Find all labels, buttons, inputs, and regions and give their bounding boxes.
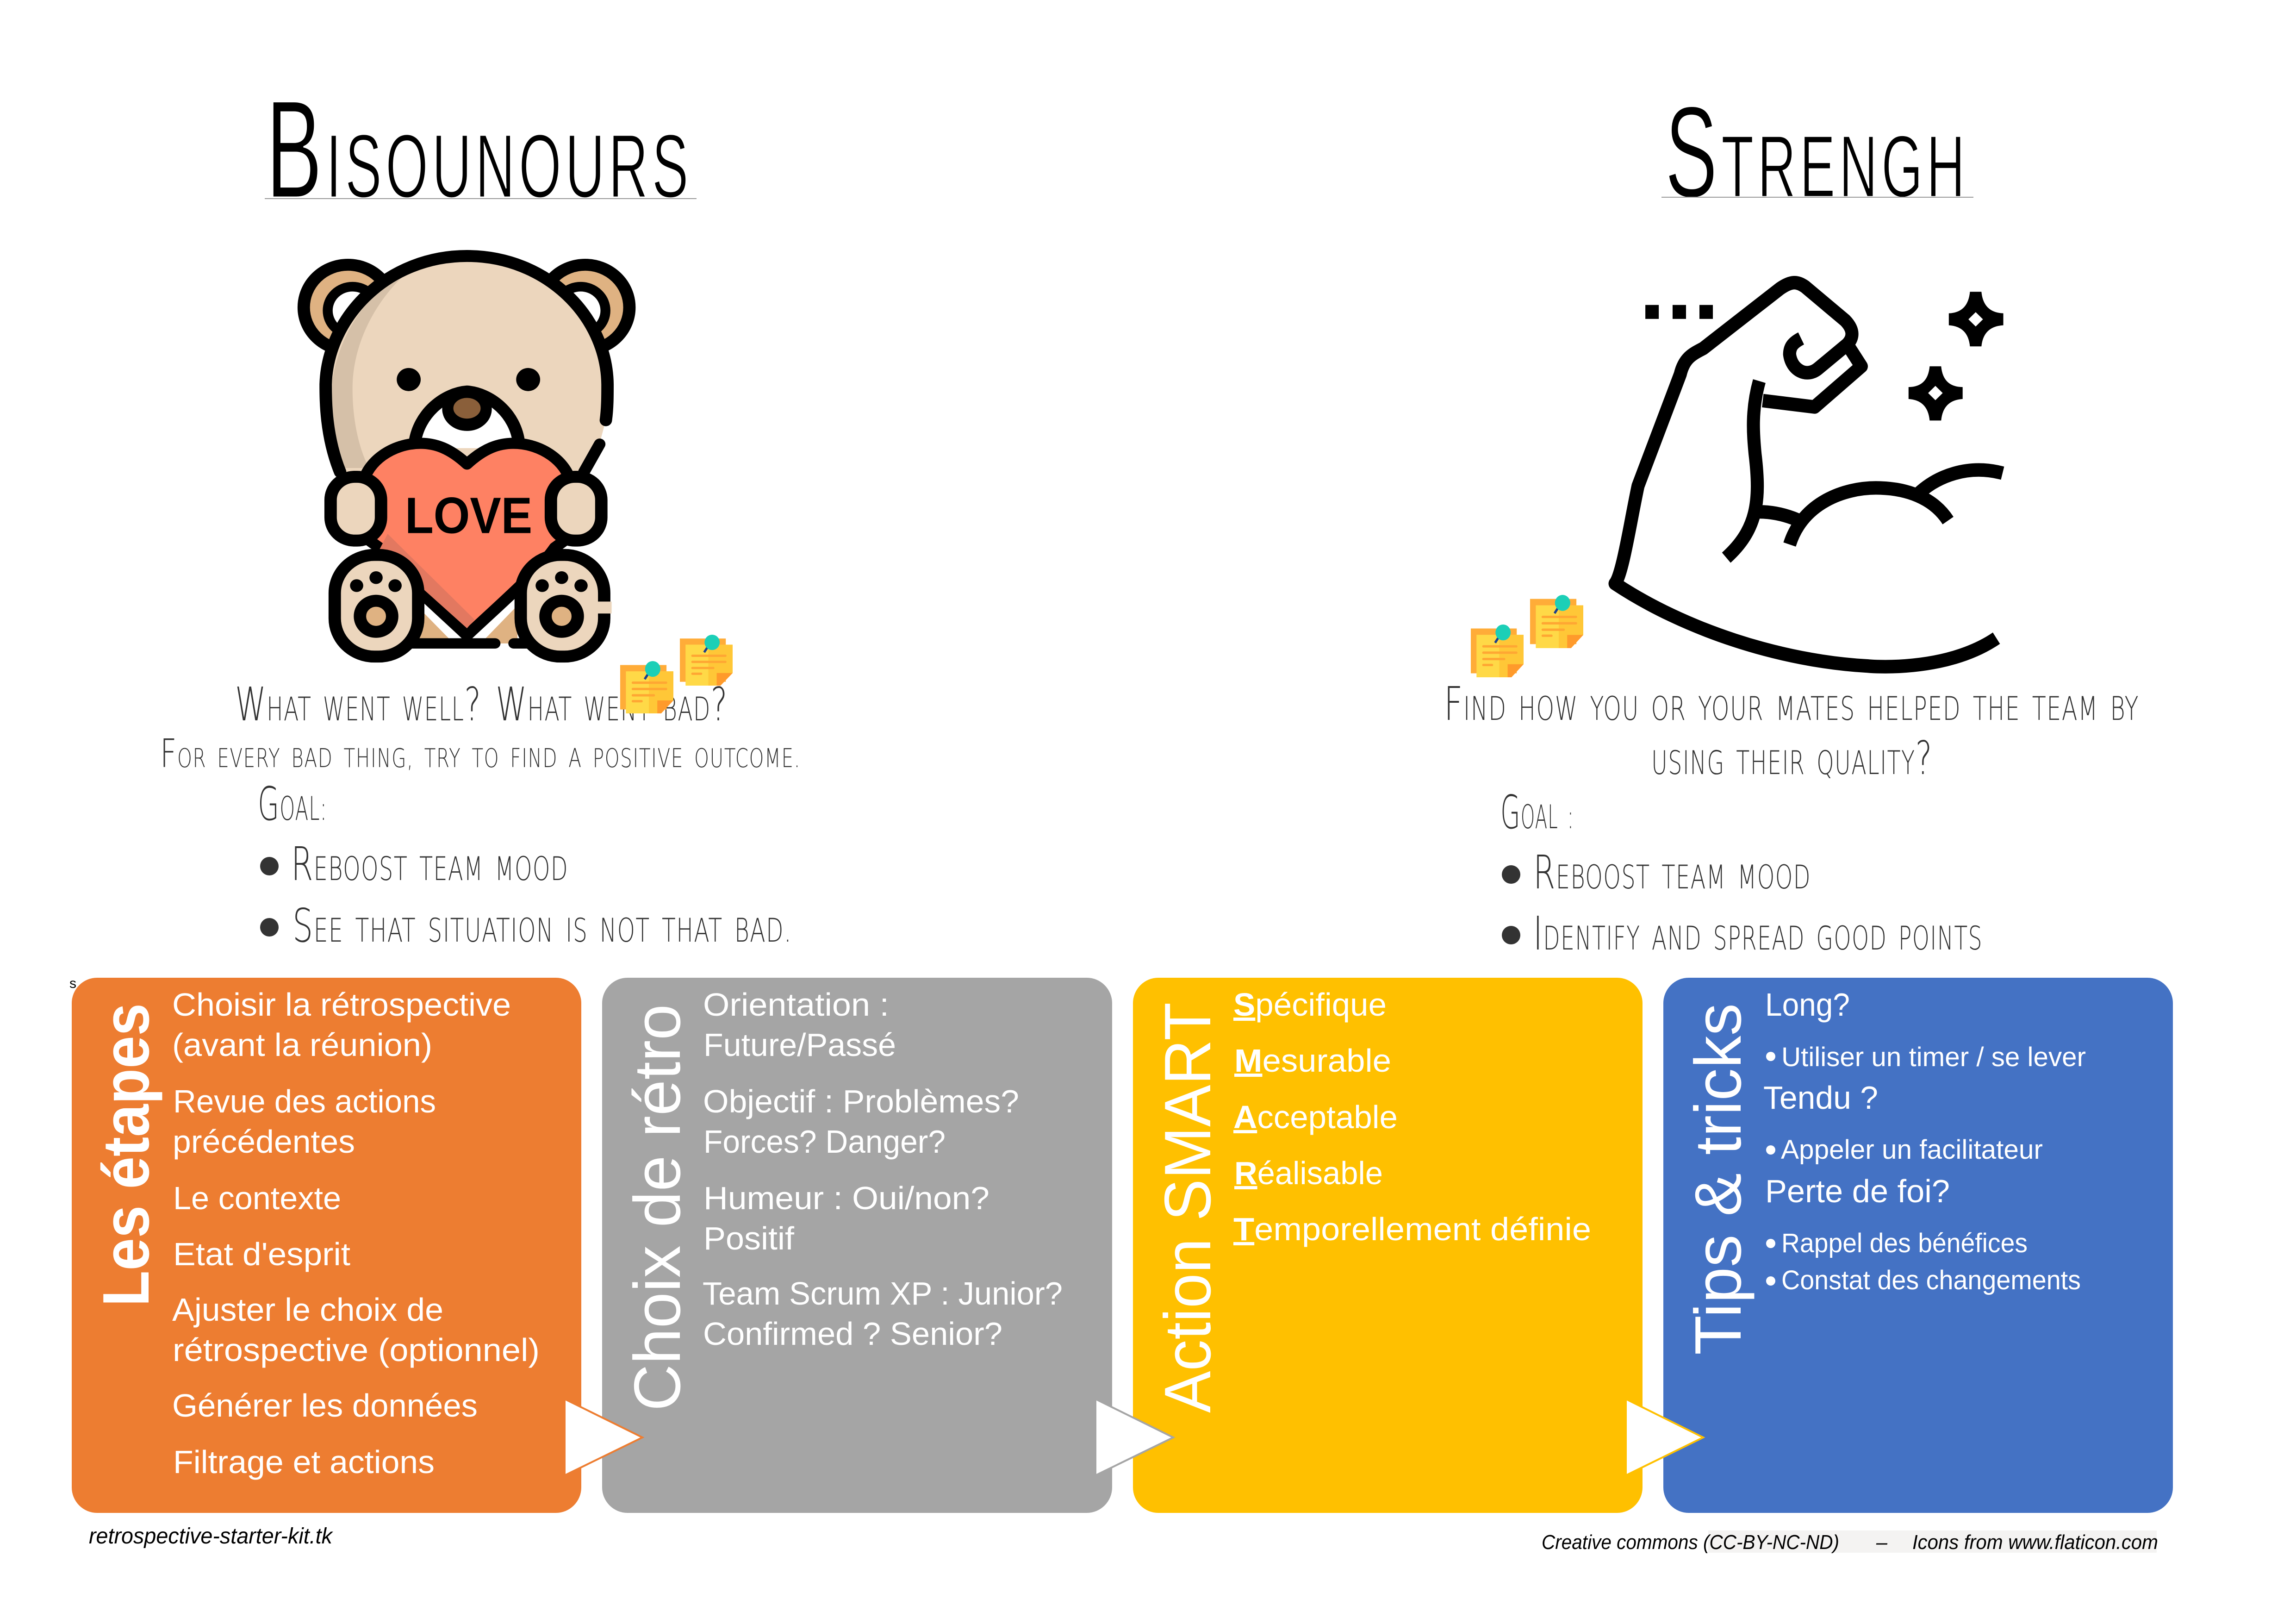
tan body below the heart bbox=[417, 606, 517, 643]
muzzle and nose bbox=[415, 387, 519, 448]
criteria list: Positif bbox=[703, 1220, 795, 1256]
panel title: Les étapes bbox=[89, 1003, 163, 1306]
step list: Générer les données bbox=[172, 1387, 478, 1424]
step list: précédentes bbox=[173, 1124, 355, 1160]
footer: credits: Icons from www.flaticon.com bbox=[1912, 1531, 2158, 1554]
icon: sticky notes over Bisounours text bbox=[620, 635, 733, 713]
step list: (avant la réunion) bbox=[172, 1027, 432, 1063]
step list: Ajuster le choix de bbox=[172, 1292, 443, 1328]
sparkle top bbox=[1949, 292, 2004, 346]
arrow: action to tips bbox=[1627, 1399, 1703, 1475]
head bbox=[326, 256, 608, 480]
tips list bbox=[1763, 987, 2086, 1295]
SMART list: Réalisable bbox=[1234, 1155, 1383, 1191]
criteria list bbox=[703, 987, 1063, 1352]
footer: website: retrospective-starter-kit.tk bbox=[89, 1524, 334, 1549]
step list: Revue des actions bbox=[173, 1083, 436, 1119]
arm outline bbox=[1615, 283, 2003, 667]
stray clipped letter: s bbox=[69, 976, 76, 991]
icon: flexed muscular arm bbox=[1615, 283, 2004, 667]
tips list: Constat des changements bbox=[1781, 1265, 2081, 1295]
SMART list: Acceptable bbox=[1233, 1099, 1398, 1135]
panel title: Tips & tricks bbox=[1681, 1003, 1755, 1355]
goal bullet one: REBOOST TEAM MOOD bbox=[291, 837, 568, 891]
goal bullet two: SEE THAT SITUATION IS NOT THAT BAD. bbox=[292, 899, 792, 953]
eyes bbox=[397, 368, 540, 391]
step list: Etat d'esprit bbox=[173, 1236, 350, 1272]
text: Strengh description bbox=[1444, 677, 2139, 961]
tips list: Utiliser un timer / se lever bbox=[1781, 1042, 2086, 1072]
panel title: Choix de rétro bbox=[621, 1004, 694, 1411]
heart: LOVE bbox=[405, 487, 532, 544]
panel: Choix de rétro bbox=[602, 978, 1112, 1513]
arms bbox=[330, 477, 601, 541]
goal bullet two bbox=[1502, 906, 1983, 961]
step list: Choisir la rétrospective bbox=[172, 987, 511, 1023]
step list: Filtrage et actions bbox=[173, 1444, 435, 1480]
criteria list: Confirmed ? Senior? bbox=[703, 1316, 1002, 1352]
footer: credits: – bbox=[1876, 1531, 1888, 1554]
step list: rétrospective (optionnel) bbox=[173, 1332, 540, 1368]
heading: Bisounours: BISOUNOURS bbox=[266, 71, 692, 227]
criteria list: Humeur : Oui/non? bbox=[703, 1180, 989, 1216]
motion dots bbox=[1645, 305, 1713, 319]
goal bullet two bbox=[260, 899, 792, 953]
criteria list: Objectif : Problèmes? bbox=[703, 1083, 1019, 1119]
icon: teddy bear holding a love heart bbox=[304, 256, 629, 656]
footer: credits: Creative commons (CC-BY-NC-ND) bbox=[1542, 1531, 1839, 1554]
tips list: Tendu ? bbox=[1763, 1080, 1878, 1116]
panel: Les étapes bbox=[72, 978, 581, 1513]
step list bbox=[172, 987, 540, 1480]
criteria list: Forces? Danger? bbox=[703, 1124, 946, 1160]
goal bullet one bbox=[260, 837, 568, 891]
goal label: GOAL: bbox=[258, 777, 327, 831]
panel: Tips & tricks bbox=[1663, 978, 2173, 1513]
criteria list: Future/Passé bbox=[703, 1027, 896, 1063]
step list: Le contexte bbox=[173, 1180, 341, 1216]
SMART list: Spécifique bbox=[1233, 987, 1387, 1023]
heading: Strengh: STRENGH bbox=[1665, 80, 1969, 225]
panel: Action SMART bbox=[1133, 978, 1643, 1513]
right foot bbox=[521, 555, 612, 656]
panel title: Action SMART bbox=[1151, 1002, 1225, 1413]
question: WHAT WENT WELL? WHAT WENT BAD? bbox=[235, 677, 728, 731]
arrow: étapes to choix bbox=[566, 1399, 642, 1475]
right ear bbox=[541, 265, 629, 350]
sparkle bottom bbox=[1909, 366, 1963, 420]
arrow: choix to action bbox=[1096, 1399, 1173, 1475]
question line two: USING THEIR QUALITY? bbox=[1651, 731, 1933, 785]
tips list: Perte de foi? bbox=[1765, 1173, 1950, 1209]
SMART list: Mesurable bbox=[1234, 1043, 1391, 1079]
goal bullet two: IDENTIFY AND SPREAD GOOD POINTS bbox=[1533, 906, 1983, 961]
instruction: FOR EVERY BAD THING, TRY TO FIND A POSITIVE OUTCOME. bbox=[160, 731, 801, 777]
tips list: Rappel des bénéfices bbox=[1781, 1228, 2028, 1258]
criteria list: Orientation : bbox=[703, 987, 889, 1023]
goal bullet one: REBOOST TEAM MOOD bbox=[1533, 845, 1811, 899]
text: Bisounours description bbox=[160, 677, 801, 953]
SMART list bbox=[1233, 987, 1591, 1247]
icon: sticky notes beside Strengh text bbox=[1471, 595, 1583, 677]
heart bbox=[363, 443, 571, 636]
left ear bbox=[304, 265, 392, 350]
goal label: GOAL : bbox=[1500, 785, 1574, 839]
SMART list: Temporellement définie bbox=[1233, 1211, 1591, 1247]
goal bullet one bbox=[1502, 845, 1811, 899]
footer: credits bbox=[1542, 1530, 2158, 1554]
criteria list: Team Scrum XP : Junior? bbox=[703, 1275, 1063, 1312]
left foot bbox=[335, 555, 418, 656]
tips list: Long? bbox=[1765, 987, 1850, 1023]
ground line bbox=[408, 637, 528, 650]
tips list: Appeler un facilitateur bbox=[1781, 1135, 2043, 1165]
